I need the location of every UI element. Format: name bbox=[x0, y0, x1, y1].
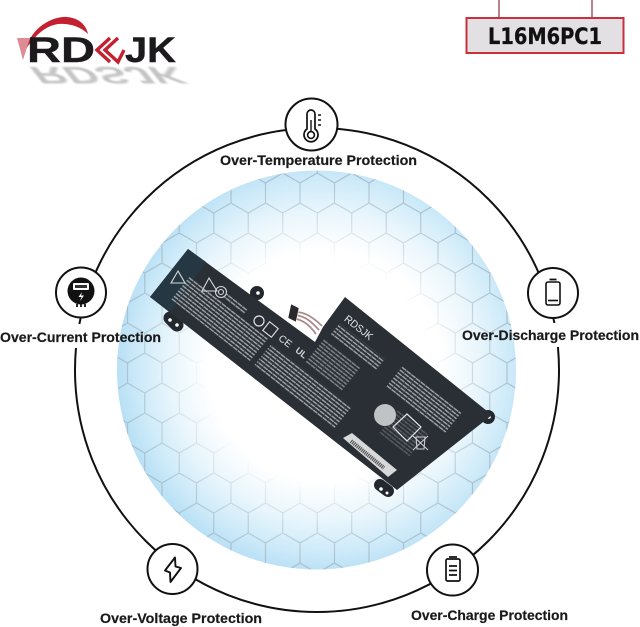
icon: full battery bbox=[427, 544, 478, 596]
logo letters RD: RD bbox=[27, 31, 95, 70]
battery illustration bbox=[150, 222, 494, 495]
white gap in ring at right label bbox=[546, 323, 568, 347]
label: over-charge: Over-Charge Protection bbox=[411, 607, 568, 623]
icon: low battery bbox=[528, 268, 578, 318]
brand text on battery: RDSJK bbox=[342, 313, 375, 343]
tag stems bbox=[499, 0, 592, 18]
tag box bbox=[466, 18, 624, 53]
battery tab holes bbox=[168, 291, 491, 494]
battery crossed bin bbox=[413, 436, 428, 450]
battery connector bbox=[288, 304, 299, 322]
blue hexagon circle background bbox=[110, 165, 525, 575]
icon: warning triangle 2 bbox=[202, 278, 217, 291]
battery recycling box bbox=[393, 414, 421, 441]
label: over-discharge: Over-Discharge Protection bbox=[462, 327, 639, 343]
logo: RDSJK bbox=[17, 17, 194, 88]
tag text: L16M6PC1 bbox=[488, 25, 602, 50]
battery mounting tabs bbox=[170, 286, 494, 491]
label text block E bbox=[385, 366, 462, 434]
logo red chevrons bbox=[97, 38, 124, 62]
label text block A bbox=[171, 276, 269, 361]
battery barcode strip bbox=[343, 433, 397, 477]
label: over-current: Over-Current Protection bbox=[0, 329, 161, 345]
label text block D bbox=[331, 323, 385, 370]
icon: square mark bbox=[263, 322, 278, 337]
label text block C bbox=[305, 339, 360, 391]
barcode bbox=[351, 441, 384, 468]
outer ring bbox=[75, 128, 559, 612]
icon: thermometer bbox=[286, 98, 338, 150]
battery teal end block bbox=[150, 249, 206, 311]
white gap in ring at left label bbox=[66, 324, 90, 348]
icon: seal mark bbox=[216, 286, 226, 298]
logo reflection: RDSJK bbox=[23, 62, 194, 88]
logo pink wedge bbox=[17, 38, 30, 60]
logo letters JK: JK bbox=[125, 31, 176, 70]
icon: lightning bolt bbox=[148, 544, 198, 594]
battery printed label bbox=[172, 277, 462, 456]
icon: UL mark: UL bbox=[294, 345, 310, 361]
battery hologram sticker bbox=[374, 404, 396, 426]
icon: CE mark: CE bbox=[276, 333, 294, 351]
icon: current meter bbox=[56, 268, 106, 318]
label small block G bbox=[379, 410, 428, 457]
label: over-temperature: Over-Temperature Protection bbox=[220, 152, 417, 168]
label: over-voltage: Over-Voltage Protection bbox=[100, 610, 262, 626]
icon: power mark bbox=[254, 316, 264, 326]
icon: warning triangle 1 bbox=[171, 271, 185, 283]
label small block F bbox=[224, 294, 248, 314]
logo red arc bbox=[26, 17, 88, 49]
battery body bbox=[150, 249, 492, 490]
battery cable bbox=[293, 312, 322, 334]
model tag: L16M6PC1 bbox=[466, 0, 624, 53]
label text block B bbox=[254, 344, 352, 429]
